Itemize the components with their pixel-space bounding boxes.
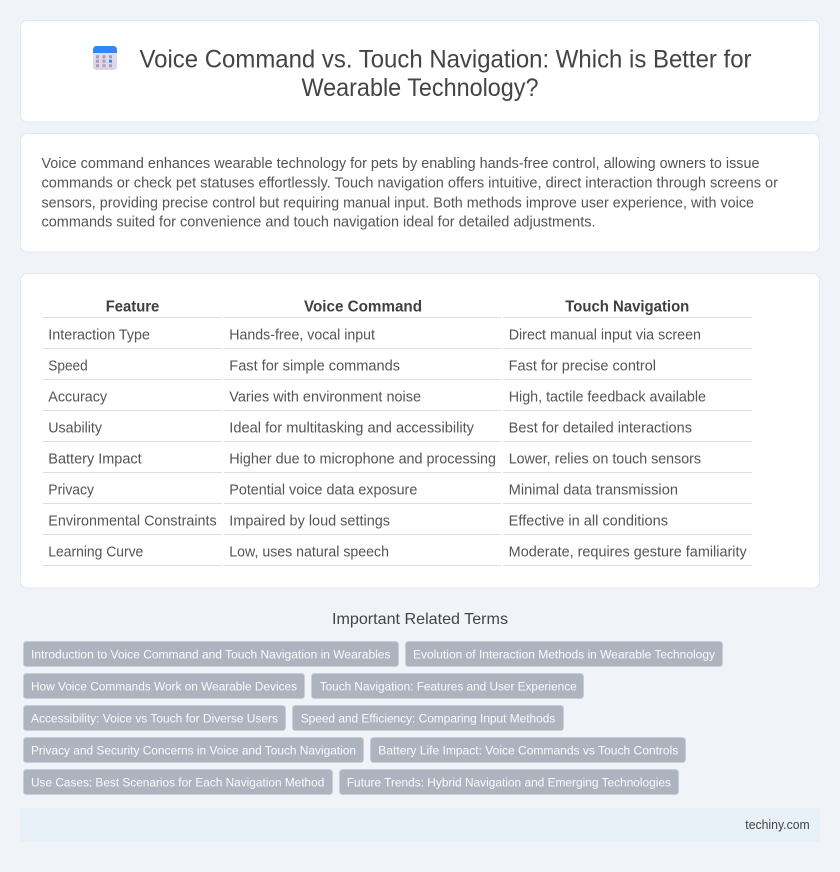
row: usability: Ideal for multitasking and accessibility	[229, 420, 475, 436]
row: speed: Fast for precise control	[509, 358, 656, 374]
row: privacy: Potential voice data exposure	[229, 482, 417, 498]
title	[140, 46, 752, 102]
row: usability: Usability	[48, 420, 103, 436]
tag row 3: Speed and Efficiency: Comparing Input Methods	[301, 711, 555, 725]
row: usability	[43, 420, 752, 442]
heading: important related terms: Important Related Terms	[332, 611, 508, 628]
tag row 5: Future Trends: Hybrid Navigation and Emerging Technologies	[347, 775, 671, 789]
row: learning curve: Low, uses natural speech	[229, 544, 389, 560]
row: usability: Best for detailed interactions	[509, 420, 692, 436]
panel: comparison table	[20, 274, 820, 588]
row: speed: Speed	[48, 358, 88, 374]
footer	[20, 808, 820, 842]
table header row: Voice Command	[304, 299, 422, 316]
tag row 3	[24, 706, 564, 730]
row: privacy: Minimal data transmission	[509, 482, 678, 498]
tag row 1	[24, 642, 722, 666]
tag row 2	[24, 674, 584, 698]
tag row 4: Battery Life Impact: Voice Commands vs Touch Controls	[378, 743, 678, 757]
row: learning curve: Moderate, requires gesture familiarity	[509, 544, 748, 560]
icon: calendar	[93, 46, 117, 70]
row: interaction type: Hands-free, vocal input	[229, 327, 375, 343]
row: environmental constraints: Environmental Constraints	[48, 513, 217, 529]
row: accuracy: High, tactile feedback available	[509, 389, 706, 405]
row: battery impact	[43, 451, 752, 473]
tag row 2: Touch Navigation: Features and User Experience	[320, 679, 577, 693]
row: accuracy	[43, 389, 752, 411]
text block: summary	[42, 156, 778, 230]
row: battery impact: Lower, relies on touch sensors	[509, 451, 701, 467]
row: environmental constraints	[43, 513, 752, 535]
row: privacy	[43, 482, 752, 504]
text block: summary: sensors, providing precise control but requiring manual input. Both methods improve user experience, with voice	[42, 196, 754, 212]
table header row: Feature	[106, 299, 159, 316]
table header row: Touch Navigation	[565, 299, 689, 316]
title: Voice Command vs. Touch Navigation: Which is Better for	[140, 46, 752, 74]
tag row 1: Introduction to Voice Command and Touch Navigation in Wearables	[31, 647, 390, 661]
row: privacy: Privacy	[48, 482, 95, 498]
row: battery impact: Higher due to microphone and processing	[229, 451, 496, 467]
table header row	[43, 299, 752, 318]
footer: techiny.com	[745, 817, 810, 832]
row: interaction type	[43, 327, 752, 349]
row: learning curve: Learning Curve	[48, 544, 143, 560]
text block: summary: Voice command enhances wearable technology for pets by enabling hands-free control, allowing owners to issue	[42, 156, 760, 172]
tag row 4: Privacy and Security Concerns in Voice and Touch Navigation	[31, 743, 356, 757]
panel: header	[20, 20, 820, 122]
tag row 2: How Voice Commands Work on Wearable Devices	[31, 679, 297, 693]
row: speed: Fast for simple commands	[229, 358, 400, 374]
row: accuracy: Varies with environment noise	[229, 389, 421, 405]
panel: summary paragraph	[20, 134, 820, 252]
tag row 1: Evolution of Interaction Methods in Wearable Technology	[413, 647, 716, 661]
row: battery impact: Battery Impact	[48, 451, 142, 467]
text block: summary: commands suited for convenience and touch navigation ideal for detailed adjustments.	[42, 214, 596, 230]
row: environmental constraints: Impaired by loud settings	[229, 513, 390, 529]
title: Wearable Technology?	[302, 74, 538, 102]
panel: related term tags	[24, 642, 722, 794]
tag row 3: Accessibility: Voice vs Touch for Diverse Users	[31, 711, 278, 725]
tag row 4	[24, 738, 686, 762]
tag row 5: Use Cases: Best Scenarios for Each Navigation Method	[31, 775, 324, 789]
row: accuracy: Accuracy	[48, 389, 108, 405]
tag row 5	[24, 770, 678, 794]
row: speed	[43, 358, 752, 380]
text block: summary: commands or check pet statuses effortlessly. Touch navigation offers intuitive, direct interaction through screens or	[42, 176, 778, 192]
row: interaction type: Direct manual input via screen	[509, 327, 701, 343]
row: environmental constraints: Effective in all conditions	[509, 513, 668, 529]
row: learning curve	[43, 544, 752, 566]
row: interaction type: Interaction Type	[48, 327, 150, 343]
